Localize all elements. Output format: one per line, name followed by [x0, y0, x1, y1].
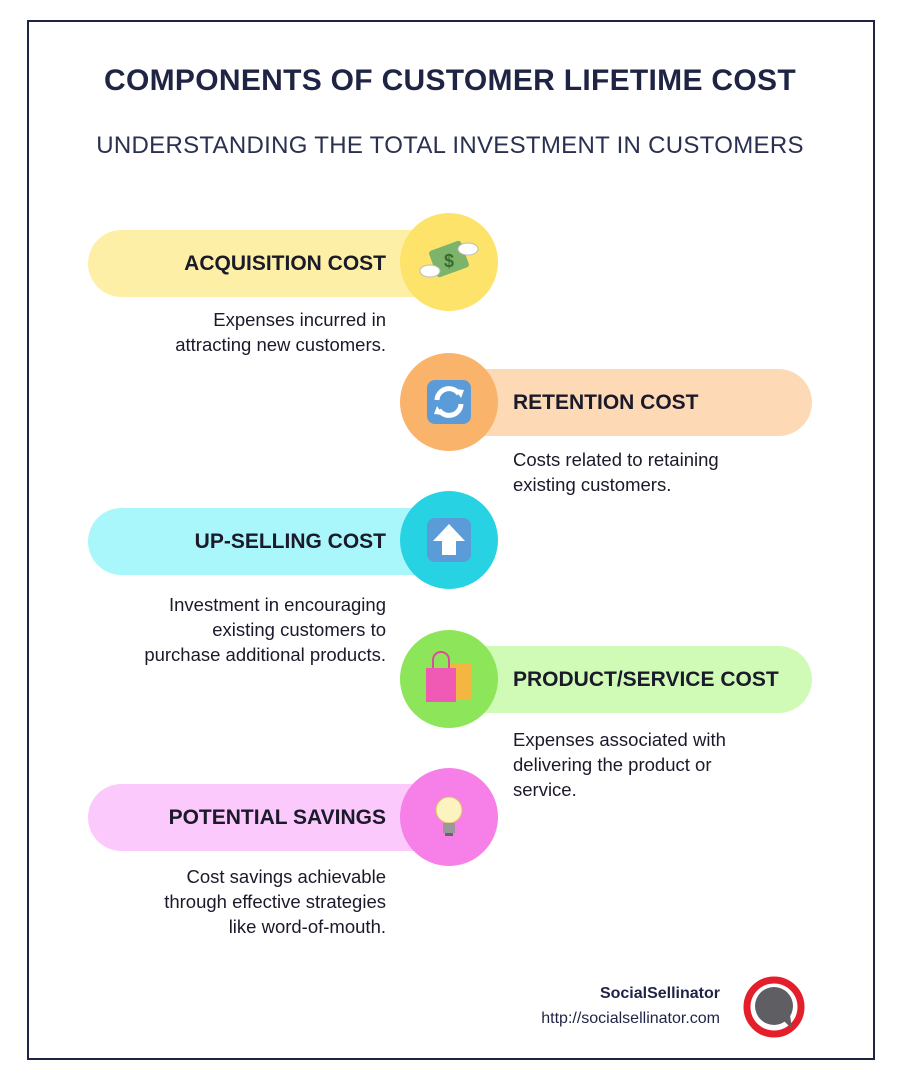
icon: money with wings: $	[444, 251, 454, 271]
pill: up-selling	[88, 508, 468, 575]
description: acquisition	[175, 309, 386, 355]
icon: up arrow	[400, 491, 498, 589]
label: acquisition: ACQUISITION COST	[184, 252, 386, 275]
description: savings: like word-of-mouth.	[229, 916, 386, 937]
item: retention cost	[400, 353, 812, 495]
item: up-selling cost	[88, 491, 498, 665]
description: product	[513, 729, 726, 800]
subtitle: UNDERSTANDING THE TOTAL INVESTMENT IN CUSTOMERS	[96, 132, 804, 159]
footer: brand	[541, 985, 720, 1027]
description: product: Expenses associated with	[513, 729, 726, 750]
description: acquisition: attracting new customers.	[175, 334, 386, 355]
description: up-selling	[144, 594, 386, 665]
description: product: service.	[513, 779, 577, 800]
footer: brand: http://socialsellinator.com	[541, 1010, 720, 1027]
description: up-selling: Investment in encouraging	[169, 594, 386, 615]
description: retention: Costs related to retaining	[513, 449, 719, 470]
pill: acquisition	[88, 230, 468, 297]
description: retention: existing customers.	[513, 474, 671, 495]
logo	[744, 976, 804, 1038]
description: retention	[513, 449, 719, 495]
label: retention: RETENTION COST	[513, 391, 699, 414]
label: savings: POTENTIAL SAVINGS	[169, 806, 386, 829]
description: savings	[164, 866, 386, 937]
icon: refresh arrows	[400, 353, 498, 451]
description: savings: through effective strategies	[164, 891, 386, 912]
title: COMPONENTS OF CUSTOMER LIFETIME COST	[104, 64, 796, 97]
pill: product	[449, 646, 812, 713]
icon: money with wings	[400, 213, 498, 311]
icon: shopping bags	[400, 630, 498, 728]
item: acquisition cost	[88, 213, 498, 355]
item: product/service cost	[400, 630, 812, 800]
description: product: delivering the product or	[513, 754, 711, 775]
description: savings: Cost savings achievable	[186, 866, 386, 887]
description: up-selling: purchase additional products.	[144, 644, 386, 665]
pill: savings	[88, 784, 468, 851]
label: up-selling: UP-SELLING COST	[195, 530, 386, 553]
icon: light bulb	[400, 768, 498, 866]
item: potential savings	[88, 768, 498, 937]
description: up-selling: existing customers to	[212, 619, 386, 640]
description: acquisition: Expenses incurred in	[213, 309, 386, 330]
label: product: PRODUCT/SERVICE COST	[513, 668, 779, 691]
pill: retention	[449, 369, 812, 436]
footer: brand: SocialSellinator	[600, 985, 720, 1002]
